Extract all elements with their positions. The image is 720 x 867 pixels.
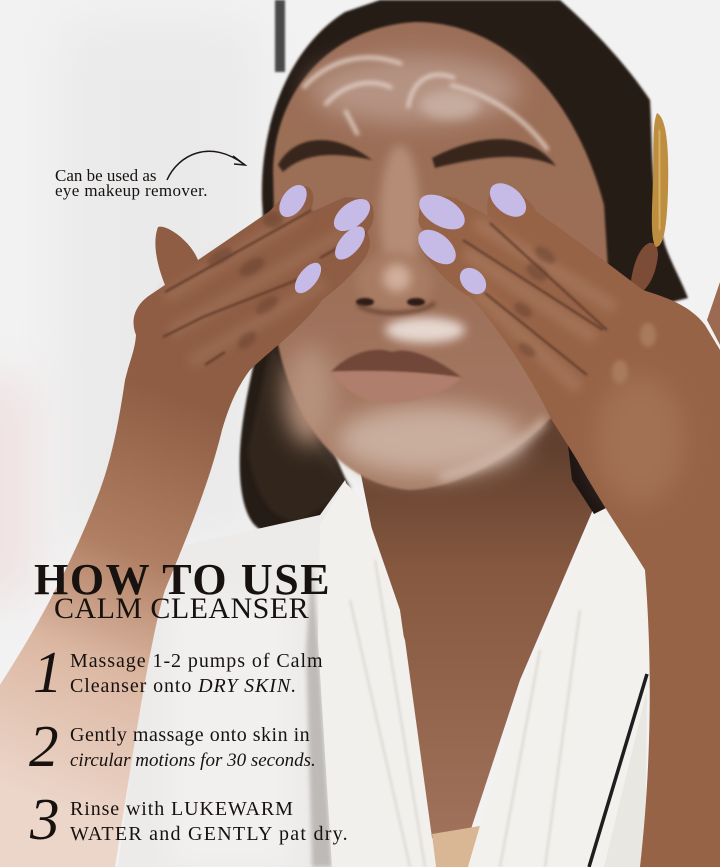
- callout: eye makeup remover: Can be used as: [55, 166, 157, 185]
- gold hair clip: [652, 113, 668, 247]
- right arm and hand: [418, 186, 720, 867]
- step 1 text: Cleanser onto DRY SKIN.: [70, 674, 297, 696]
- step 1: [33, 639, 323, 705]
- chest top garment: [432, 826, 480, 867]
- nose: [356, 252, 435, 313]
- ear: [630, 243, 658, 295]
- step 1 number: 1: [33, 639, 62, 705]
- step 1 text: Massage 1-2 pumps of Calm: [70, 650, 323, 672]
- robe: [118, 480, 445, 867]
- neck and chest: [360, 400, 592, 838]
- lavender nails: [274, 177, 532, 299]
- face: [273, 22, 610, 490]
- curved arrow: [167, 151, 245, 180]
- step 2 text: Gently massage onto skin in: [70, 724, 310, 746]
- step 2 text: [70, 724, 316, 770]
- eyebrows: [278, 139, 556, 172]
- step 2 number: 2: [29, 713, 58, 779]
- heading: how to use: HOW TO USE: [34, 555, 331, 604]
- hair strand beside neck: [568, 445, 606, 514]
- callout: eye makeup remover: eye makeup remover.: [55, 181, 208, 200]
- subheading: calm cleanser: CALM CLEANSER: [54, 592, 309, 625]
- hair: [240, 0, 688, 532]
- step 2 text: circular motions for 30 seconds.: [70, 750, 316, 770]
- robe collars: [318, 482, 650, 867]
- step 2: [29, 713, 316, 779]
- step 3 text: [70, 798, 349, 844]
- left arm and hand: [0, 186, 374, 867]
- step 1 text: [70, 650, 323, 696]
- step 3 text: WATER and GENTLY pat dry.: [70, 822, 349, 844]
- step 3: [30, 786, 349, 852]
- step 3 text: Rinse with LUKEWARM: [70, 798, 294, 820]
- callout: eye makeup remover: [55, 166, 208, 200]
- step 3 number: 3: [30, 786, 60, 852]
- lips: [331, 350, 462, 403]
